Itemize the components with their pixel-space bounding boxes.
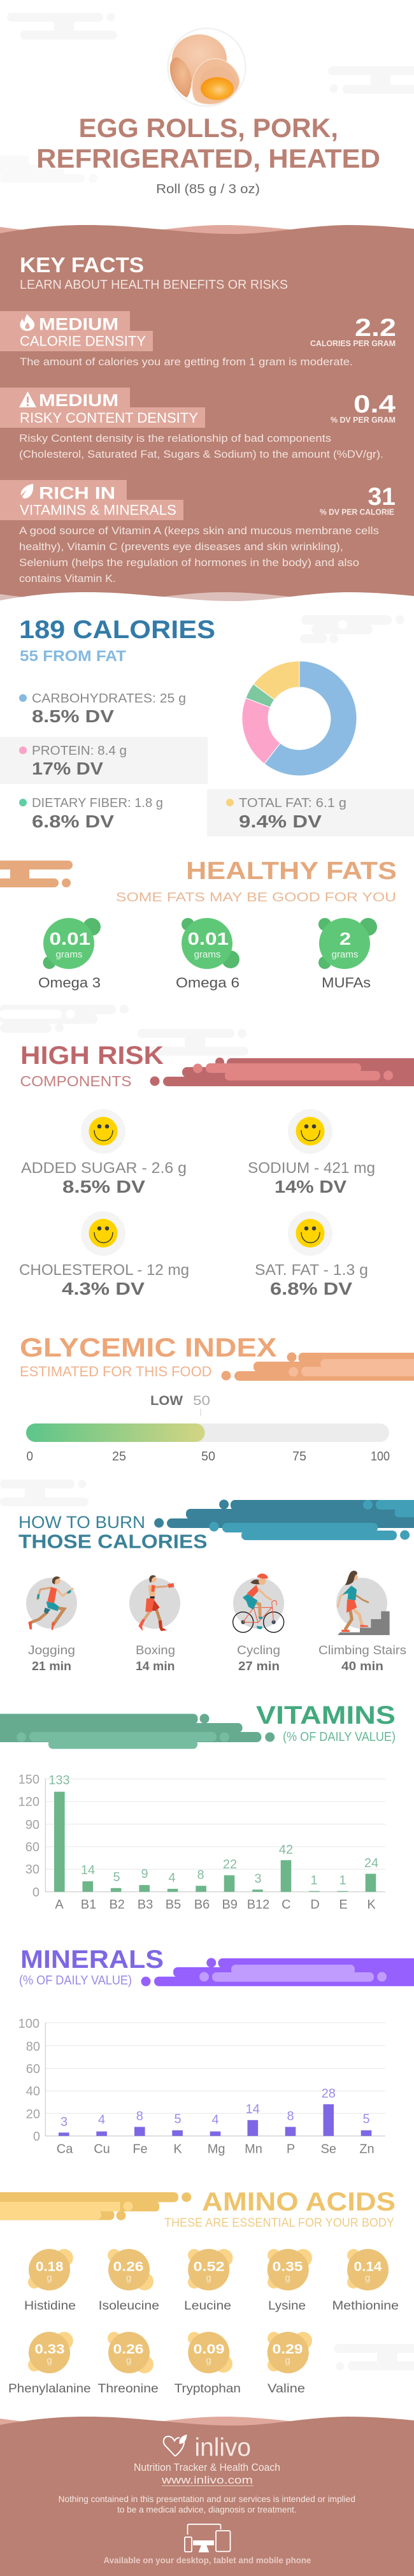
heading: calories: 55 FROM FAT: [20, 648, 126, 665]
gauge marker: [150, 1394, 210, 1416]
bar chart: minerals: P: [287, 2143, 295, 2157]
bar chart: minerals: Fe: [132, 2143, 148, 2157]
macro: protein: [0, 737, 208, 784]
fact: risky content density: % DV PER GRAM: [331, 415, 396, 425]
heading: high risk: COMPONENTS: [20, 1073, 131, 1089]
bar chart: minerals: 5: [174, 2113, 182, 2127]
amino: valine: [268, 2332, 312, 2396]
icon: stair climber: [336, 1571, 390, 1635]
decorative cloud left: [0, 156, 97, 183]
heading: vitamins: VITAMINS: [256, 1701, 396, 1729]
fact: rich in vitamins and minerals: [0, 480, 396, 585]
panel: how to burn those calories: [0, 1480, 414, 1673]
serving size: Roll (85 g / 3 oz): [156, 182, 260, 196]
bar chart: minerals: Mg: [208, 2143, 225, 2157]
bar chart: vitamins: 1: [310, 1874, 318, 1888]
decorative bars: [0, 861, 73, 887]
gauge marker: 50: [193, 1394, 210, 1408]
heading: key facts: LEARN ABOUT HEALTH BENEFITS OR RISKS: [20, 278, 288, 292]
activity: boxing: 14 min: [136, 1660, 175, 1673]
bar chart: minerals: 28: [322, 2087, 336, 2101]
amino: lysine: g: [285, 2273, 290, 2283]
activity: cycling: Cycling: [237, 1644, 280, 1657]
panel: key facts: [0, 225, 414, 606]
panel: glycemic index: [20, 1332, 414, 1464]
panel: minerals: [18, 1946, 414, 2157]
macro: protein: 17% DV: [32, 759, 103, 778]
icon: jogger: [26, 1576, 77, 1630]
bar chart: vitamins: B12: [247, 1898, 269, 1912]
activity: cycling: [233, 1573, 284, 1673]
bar chart: minerals: Mn: [245, 2143, 262, 2157]
item: cholesterol: [19, 1211, 189, 1299]
badge: omega 3: [38, 918, 101, 991]
bar chart: minerals: 14: [246, 2102, 260, 2116]
bar chart: minerals: 5: [362, 2113, 370, 2127]
bar chart: minerals: K: [173, 2143, 182, 2157]
badge: omega 6: Omega 6: [176, 975, 239, 991]
bar chart: minerals: 4: [211, 2113, 219, 2127]
disclaimer: to be a medical advice, diagnosis or treatment.: [117, 2504, 297, 2514]
heading: healthy fats: [116, 857, 397, 905]
bar chart: vitamins: B6: [194, 1898, 210, 1912]
heading: minerals: [19, 1946, 164, 1988]
bar chart: vitamins: A: [55, 1898, 64, 1912]
amino: isoleucine: Isoleucine: [99, 2299, 159, 2313]
bar chart: vitamins: K: [367, 1898, 376, 1912]
amino: valine: Valine: [268, 2382, 305, 2396]
fact: rich in vitamins and minerals: A good source of Vitamin A (keeps skin and mucous membrane cells: [19, 525, 379, 537]
bar chart: vitamins: 60: [25, 1840, 39, 1854]
decorative cloud: [300, 615, 404, 643]
activity: boxing: Boxing: [136, 1644, 175, 1657]
amino: valine: 0.29: [273, 2342, 303, 2357]
amino: phenylalanine: 0.33: [34, 2342, 65, 2357]
activity: jogging: Jogging: [28, 1644, 75, 1657]
macro: protein: PROTEIN: 8.4 g: [32, 744, 127, 758]
fact: calorie density: CALORIES PER GRAM: [310, 338, 396, 348]
heading: how to burn: HOW TO BURN: [18, 1513, 145, 1532]
bar chart: minerals: 3: [61, 2115, 68, 2129]
fact: calorie density: CALORIE DENSITY: [20, 333, 146, 349]
bar chart: vitamins: [18, 1773, 385, 1912]
gauge scale: [27, 1450, 390, 1464]
icon: devices: [185, 2524, 231, 2552]
badge: mufas: [318, 918, 377, 991]
panel: healthy fats: [0, 857, 397, 991]
amino: isoleucine: [99, 2249, 159, 2313]
fact: calorie density: [0, 311, 396, 368]
bar chart: vitamins: 0: [32, 1886, 39, 1900]
website link: www.inlivo.com: [161, 2474, 253, 2486]
macro: total fat: 9.4% DV: [239, 811, 322, 831]
amino: tryptophan: 0.09: [194, 2342, 224, 2357]
item: added sugar: 8.5% DV: [62, 1177, 145, 1197]
fact: risky content density: [0, 388, 396, 460]
bar chart: vitamins: B2: [109, 1898, 125, 1912]
bar chart: vitamins: 22: [223, 1858, 237, 1872]
badge: omega 3: Omega 3: [38, 975, 101, 991]
decorative bars: [222, 1353, 414, 1381]
bar chart: vitamins: B5: [166, 1898, 181, 1912]
tagline: Nutrition Tracker & Health Coach: [134, 2461, 280, 2473]
heading: high risk: [20, 1042, 164, 1089]
panel background with waves: [0, 225, 414, 606]
fact: risky content density: MEDIUM: [39, 391, 118, 410]
heading: amino acids: THESE ARE ESSENTIAL FOR YOUR BODY: [164, 2216, 394, 2230]
amino: phenylalanine: Phenylalanine: [8, 2382, 91, 2396]
bar chart: vitamins: 150: [18, 1773, 39, 1787]
fact: calorie density: MEDIUM: [39, 315, 118, 334]
macro: total fat: [207, 789, 414, 836]
activity: jogging: 21 min: [32, 1660, 71, 1673]
bar chart: vitamins: B9: [222, 1898, 238, 1912]
amino: threonine: g: [126, 2355, 131, 2366]
icon: flame: [20, 314, 34, 331]
amino: leucine: [184, 2249, 233, 2313]
amino: threonine: 0.26: [113, 2342, 144, 2357]
bar chart: minerals: 100: [18, 2017, 39, 2031]
title: [36, 113, 380, 173]
decorative bars: [141, 1958, 414, 1986]
bar chart: vitamins: B3: [138, 1898, 153, 1912]
fact: rich in vitamins and minerals: healthy), Vitamin C (prevents eye diseases and skin wrinkling),: [19, 541, 343, 553]
decorative bars: [0, 2192, 191, 2220]
gauge scale: 50: [201, 1450, 215, 1464]
item: saturated fat: SAT. FAT - 1.3 g: [255, 1262, 368, 1279]
heading: minerals: (% OF DAILY VALUE): [19, 1974, 132, 1988]
badge: mufas: MUFAs: [322, 975, 371, 991]
badge: omega 6: [176, 918, 239, 991]
panel: amino acids: [0, 2187, 414, 2396]
heading: key facts: KEY FACTS: [20, 253, 144, 277]
heading: how to burn: [18, 1513, 208, 1553]
panel: footer: [0, 2417, 414, 2576]
amino: tryptophan: Tryptophan: [175, 2382, 241, 2396]
bar chart: vitamins: 133: [48, 1773, 70, 1787]
bar chart: minerals: Cu: [94, 2143, 110, 2157]
bar chart: vitamins: 3: [254, 1872, 262, 1886]
badge: mufas: 2: [339, 929, 351, 949]
amino: histidine: g: [46, 2273, 52, 2283]
bar chart: vitamins: 5: [113, 1870, 120, 1884]
availability note: Available on your desktop, tablet and mobile phone: [103, 2555, 311, 2565]
amino: isoleucine: g: [126, 2273, 131, 2283]
activity: climbing stairs: [318, 1571, 406, 1673]
panel: calories: [0, 615, 414, 836]
gauge scale: 75: [292, 1450, 306, 1464]
activity: climbing stairs: Climbing Stairs: [318, 1644, 406, 1657]
icon: cyclist: [233, 1573, 284, 1633]
bar chart: minerals: Zn: [359, 2143, 375, 2157]
decorative cloud: [334, 2344, 414, 2370]
decorative cloud top left: [7, 13, 117, 40]
item: saturated fat: 6.8% DV: [270, 1279, 352, 1299]
heading: healthy fats: SOME FATS MAY BE GOOD FOR YOU: [116, 891, 396, 905]
fact: risky content density: RISKY CONTENT DENSITY: [20, 410, 198, 426]
macro: carbohydrates: [19, 692, 186, 726]
gauge bar: [26, 1423, 389, 1442]
macro: dietary fiber: 6.8% DV: [32, 811, 114, 831]
icon: leaf: [21, 484, 33, 498]
badge: omega 3: 0.01: [50, 929, 90, 949]
badge: mufas: grams: [331, 949, 358, 960]
macro: total fat: TOTAL FAT: 6.1 g: [239, 796, 346, 810]
bar chart: vitamins: 4: [168, 1871, 176, 1885]
panel: vitamins: [0, 1701, 396, 1912]
bar chart: vitamins: 90: [25, 1818, 39, 1832]
decorative cloud right: [328, 66, 414, 94]
heading: high risk: HIGH RISK: [20, 1042, 164, 1070]
bar chart: minerals: 8: [136, 2109, 143, 2123]
bar chart: minerals: 80: [26, 2040, 40, 2054]
bar chart: minerals: 40: [26, 2085, 40, 2099]
footer background with waves: [0, 2417, 414, 2576]
fact: rich in vitamins and minerals: % DV PER CALORIE: [320, 507, 394, 516]
amino: methionine: 0.14: [354, 2259, 382, 2274]
bar chart: minerals: 4: [98, 2113, 105, 2127]
amino: methionine: g: [365, 2273, 370, 2283]
amino: histidine: 0.18: [36, 2259, 64, 2274]
item: sodium: [248, 1109, 375, 1197]
bar chart: minerals: 8: [287, 2109, 294, 2123]
gauge scale: 0: [27, 1450, 33, 1464]
gauge marker: LOW: [150, 1394, 183, 1408]
donut chart: [242, 661, 357, 776]
heading: key facts: [20, 253, 288, 292]
bar chart: vitamins: E: [339, 1898, 348, 1912]
bar chart: vitamins: 8: [197, 1868, 204, 1882]
bar chart: vitamins: 24: [364, 1856, 378, 1870]
badge: omega 6: 0.01: [187, 929, 229, 949]
heading: vitamins: [256, 1701, 396, 1744]
bar chart: minerals: 20: [26, 2107, 40, 2121]
amino: histidine: [24, 2249, 76, 2313]
bar chart: minerals: Se: [321, 2143, 336, 2157]
bar chart: vitamins: 9: [141, 1867, 148, 1881]
amino: lysine: [268, 2249, 312, 2313]
bar chart: vitamins: D: [310, 1898, 320, 1912]
item: added sugar: ADDED SUGAR - 2.6 g: [21, 1160, 187, 1177]
badge: omega 3: grams: [56, 949, 83, 960]
amino: lysine: Lysine: [268, 2299, 306, 2313]
heading: how to burn: THOSE CALORIES: [18, 1530, 208, 1553]
activity: jogging: [26, 1576, 77, 1673]
amino: valine: g: [285, 2355, 290, 2366]
amino: leucine: g: [206, 2273, 211, 2283]
heading: amino acids: AMINO ACIDS: [202, 2187, 396, 2216]
decorative bars: [154, 1499, 414, 1540]
macro: dietary fiber: [19, 796, 163, 831]
fact: rich in vitamins and minerals: contains Vitamin K.: [19, 572, 116, 585]
item: cholesterol: 4.3% DV: [62, 1279, 145, 1299]
logo: inlivo: inlivo: [195, 2434, 251, 2462]
item: sodium: SODIUM - 421 mg: [248, 1160, 375, 1177]
activity: climbing stairs: 40 min: [341, 1660, 383, 1673]
amino: phenylalanine: g: [46, 2355, 52, 2366]
fact: risky content density: (Cholesterol, Saturated Fat, Sugars & Sodium) to the amount (%DV/gr).: [19, 448, 383, 460]
gauge scale: 100: [371, 1450, 390, 1464]
title: EGG ROLLS, PORK,: [79, 113, 338, 143]
panel: high risk components: [0, 1005, 414, 1299]
disclaimer: Nothing contained in this presentation and our services is intended or implied: [59, 2494, 355, 2504]
heading: glycemic index: ESTIMATED FOR THIS FOOD: [20, 1364, 211, 1379]
heading: calories: [19, 616, 215, 665]
icon: warning triangle: [19, 391, 36, 407]
macro: dietary fiber: DIETARY FIBER: 1.8 g: [32, 796, 163, 810]
amino: threonine: Threonine: [97, 2382, 159, 2396]
bar chart: vitamins: 1: [339, 1874, 346, 1888]
fact: risky content density: Risky Content density is the relationship of bad components: [19, 432, 331, 444]
amino: tryptophan: [175, 2332, 241, 2396]
decorative bars: [0, 1714, 275, 1749]
bar chart: minerals: 60: [26, 2062, 40, 2076]
amino: threonine: [97, 2332, 159, 2396]
fact: rich in vitamins and minerals: 31: [368, 483, 396, 511]
fact: calorie density: The amount of calories you are getting from 1 gram is moderate.: [20, 356, 353, 368]
heading: glycemic index: [20, 1332, 276, 1379]
amino: tryptophan: g: [206, 2355, 211, 2366]
macro: carbohydrates: 8.5% DV: [32, 706, 114, 726]
fact: calorie density: 2.2: [355, 314, 396, 342]
title: REFRIGERATED, HEATED: [36, 143, 380, 173]
bar chart: minerals: 0: [33, 2130, 40, 2144]
activity: boxing: [129, 1575, 180, 1673]
decorative cloud: [0, 1480, 89, 1506]
fact: rich in vitamins and minerals: VITAMINS & MINERALS: [20, 502, 176, 518]
decorative clouds: [0, 1005, 248, 1056]
icon: boxer: [129, 1575, 180, 1631]
bar chart: vitamins: 14: [81, 1863, 95, 1877]
item: sodium: 14% DV: [275, 1177, 346, 1197]
heading: vitamins: (% OF DAILY VALUE): [283, 1730, 396, 1744]
logo: inlivo: [164, 2434, 251, 2462]
amino: isoleucine: 0.26: [113, 2259, 144, 2274]
disclaimer: [59, 2494, 355, 2514]
badge: omega 6: grams: [194, 949, 220, 960]
heading: minerals: MINERALS: [20, 1946, 164, 1974]
bar chart: vitamins: 42: [279, 1843, 293, 1857]
bar chart: vitamins: 30: [25, 1863, 39, 1877]
fact: rich in vitamins and minerals: RICH IN: [39, 483, 115, 502]
fact: risky content density: 0.4: [353, 391, 396, 418]
amino: methionine: Methionine: [332, 2299, 399, 2313]
bar chart: vitamins: C: [282, 1898, 291, 1912]
bar chart: vitamins: B1: [81, 1898, 96, 1912]
macro: carbohydrates: CARBOHYDRATES: 25 g: [32, 692, 186, 706]
food photo: eggs: [168, 28, 246, 106]
amino: leucine: Leucine: [184, 2299, 231, 2313]
heading: healthy fats: HEALTHY FATS: [186, 857, 397, 885]
heading: glycemic index: GLYCEMIC INDEX: [20, 1332, 276, 1362]
amino: histidine: Histidine: [24, 2299, 76, 2313]
fact: rich in vitamins and minerals: Selenium (helps the regulation of hormones in the body) and also: [19, 557, 359, 569]
bar chart: minerals: Ca: [57, 2143, 73, 2157]
amino: methionine: [332, 2249, 399, 2313]
item: saturated fat: [255, 1211, 368, 1299]
heading: calories: 189 CALORIES: [19, 616, 215, 644]
decorative bars: [150, 1058, 414, 1086]
amino: lysine: 0.35: [273, 2259, 303, 2274]
amino: leucine: 0.52: [194, 2259, 224, 2274]
bar chart: minerals: [18, 2017, 385, 2157]
gauge scale: 25: [112, 1450, 126, 1464]
item: cholesterol: CHOLESTEROL - 12 mg: [19, 1262, 189, 1279]
heading: amino acids: [164, 2187, 396, 2230]
activity: cycling: 27 min: [238, 1660, 280, 1673]
item: added sugar: [21, 1109, 187, 1197]
bar chart: vitamins: 120: [18, 1795, 39, 1809]
amino: phenylalanine: [8, 2332, 91, 2396]
